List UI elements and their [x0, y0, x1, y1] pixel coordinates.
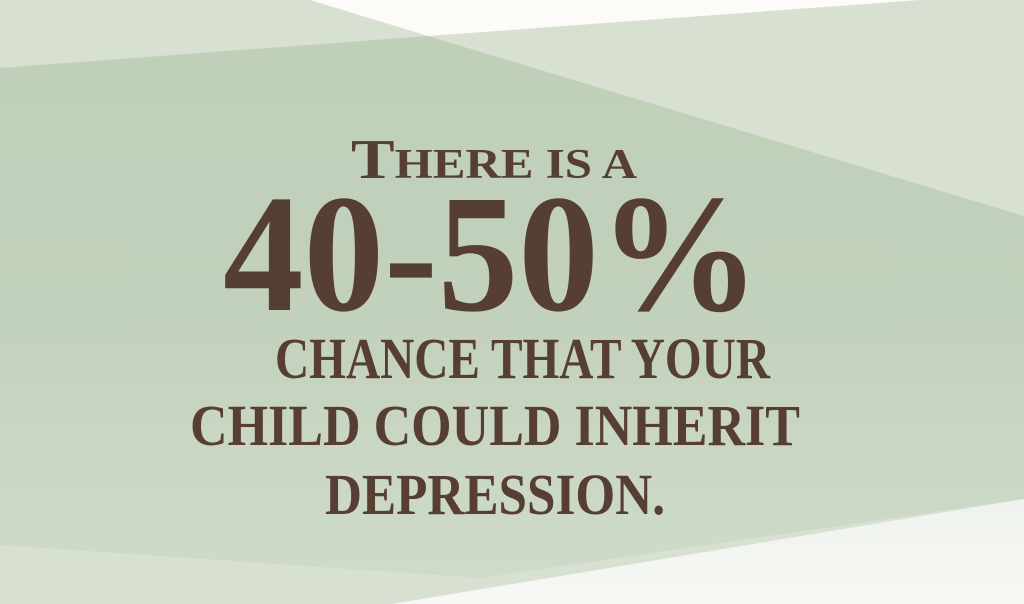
line: There is a: THERE IS A [351, 129, 638, 191]
line: depression.: DEPRESSION. [325, 462, 665, 527]
background: white bottom right wedge [392, 499, 1024, 604]
background: white top triangle [310, 0, 920, 36]
line: child could inherit: CHILD COULD INHERIT [190, 393, 800, 458]
headline text [190, 129, 800, 527]
line: chance that your: CHANCE THAT YOUR [275, 326, 771, 391]
line: 40-50%: 40-50% [223, 161, 760, 347]
